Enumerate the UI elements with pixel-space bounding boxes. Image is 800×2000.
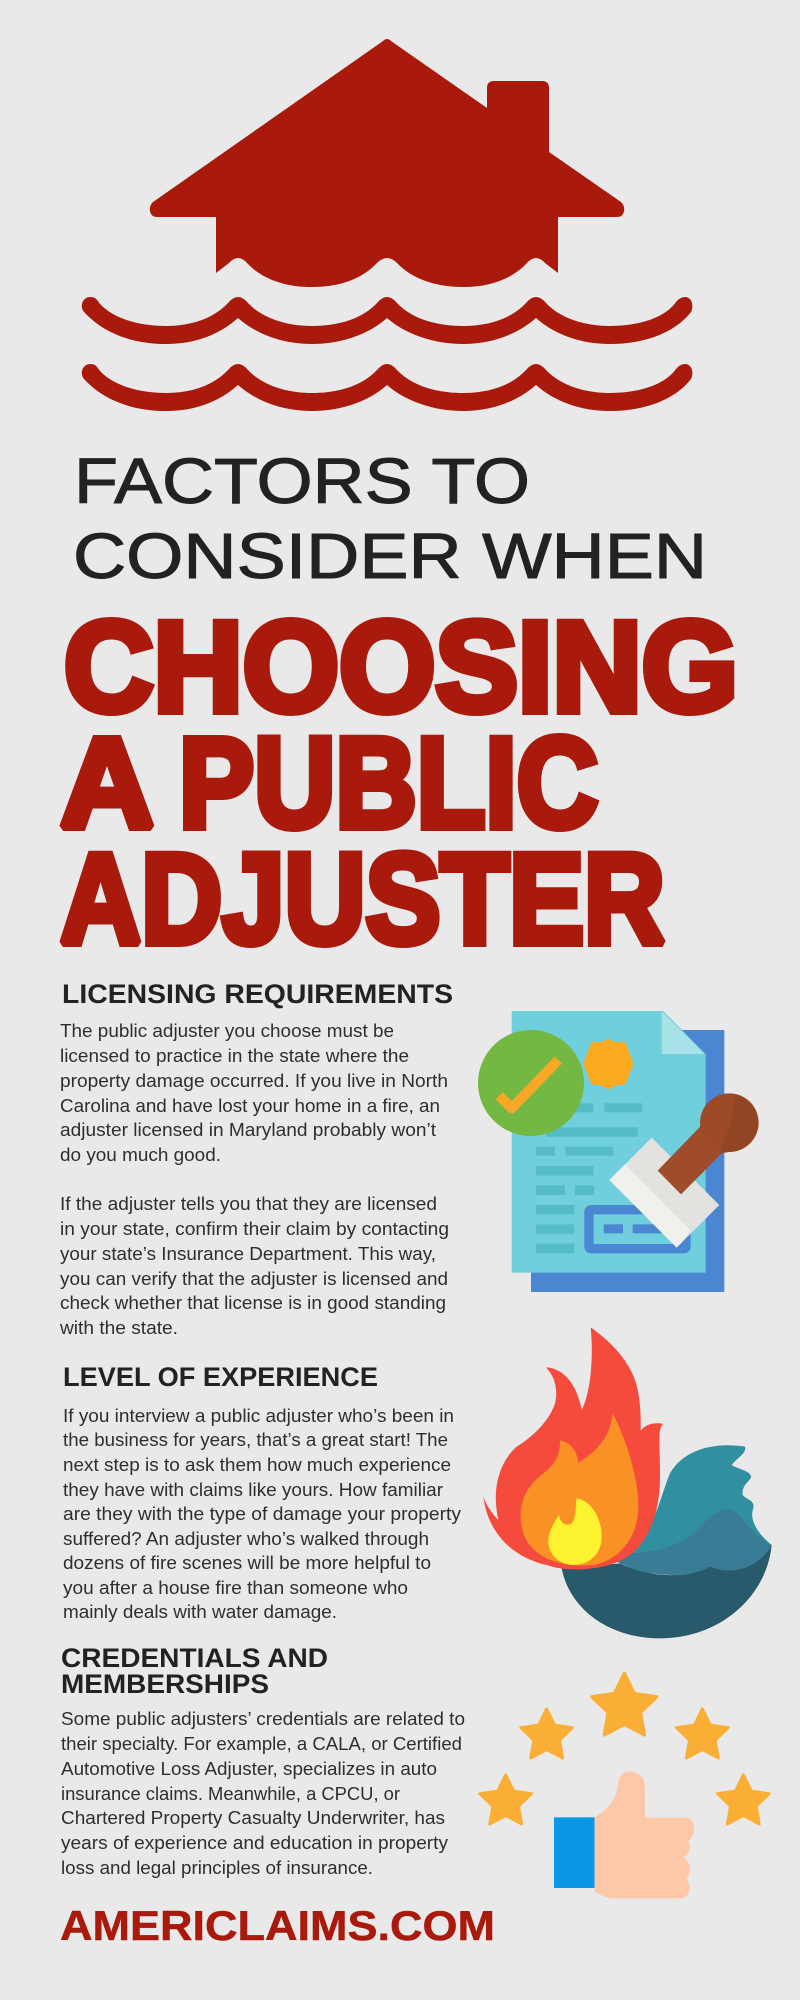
text block: experience paragraph: are they with the type of damage your property [63, 1503, 462, 1524]
title line: adjuster: ADJUSTER [60, 828, 665, 971]
title [60, 445, 738, 971]
flame inner [548, 1498, 602, 1565]
section: level of experience [63, 1362, 462, 1622]
heading: credentials and memberships: MEMBERSHIPS [61, 1669, 269, 1699]
stamp base [609, 1138, 719, 1248]
house silhouette [150, 39, 624, 287]
section: credentials and memberships [61, 1643, 465, 1878]
text block: licensing paragraph one [60, 1020, 448, 1165]
heading: credentials and memberships [61, 1643, 328, 1699]
title line: choosing: CHOOSING [64, 596, 738, 739]
text block: licensing paragraph one: property damage occurred. If you live in North [60, 1070, 448, 1091]
seal badge [584, 1040, 632, 1088]
flame middle [521, 1413, 638, 1566]
text block: credentials paragraph: Automotive Loss Adjuster, specializes in auto [61, 1758, 437, 1779]
heading: credentials and memberships: CREDENTIALS AND [61, 1643, 328, 1673]
text block: licensing paragraph two: you can verify that the adjuster is licensed and [60, 1268, 448, 1289]
front page [512, 1011, 706, 1273]
text block: licensing paragraph two: in your state, confirm their claim by contacting [60, 1218, 449, 1239]
text lines [536, 1103, 642, 1253]
lower wave [82, 364, 692, 411]
wave crest [627, 1445, 772, 1573]
text block: licensing paragraph two: If the adjuster tells you that they are licensed [60, 1193, 437, 1214]
text block: credentials paragraph [61, 1708, 465, 1878]
footer: website: AMERICLAIMS.COM [60, 1902, 495, 1949]
upper wave [82, 297, 692, 344]
check mark [499, 1060, 558, 1108]
text block: credentials paragraph: years of experience and education in property [61, 1832, 449, 1853]
hand [595, 1772, 694, 1898]
text block: credentials paragraph: Chartered Property Casualty Underwriter, has [61, 1807, 445, 1828]
page fold [662, 1011, 704, 1054]
title line: a public: PUBLIC [179, 712, 598, 855]
title line: factors to: FACTORS TO [74, 445, 530, 517]
heading: level of experience: LEVEL OF EXPERIENCE [63, 1362, 378, 1392]
sleeve [554, 1817, 595, 1888]
text block: licensing paragraph one: Carolina and have lost your home in a fire, an [60, 1095, 440, 1116]
icon: fire and water [483, 1327, 772, 1638]
text block: experience paragraph [63, 1405, 462, 1622]
text block: experience paragraph: they have with claims like yours. How familiar [63, 1479, 443, 1500]
heading: licensing requirements: LICENSING REQUIREMENTS [62, 979, 453, 1009]
text block: experience paragraph: suffered? An adjuster who’s walked through [63, 1528, 429, 1549]
text block: licensing paragraph one: licensed to practice in the state where the [60, 1045, 409, 1066]
wave middle [617, 1509, 772, 1575]
text block: experience paragraph: dozens of fire scenes will be more helpful to [63, 1552, 431, 1573]
text block: licensing paragraph one: adjuster licensed in Maryland probably won’t [60, 1119, 437, 1140]
text block: licensing paragraph two [59, 1193, 449, 1338]
back page [531, 1030, 724, 1292]
text block: credentials paragraph: loss and legal principles of insurance. [61, 1857, 373, 1878]
text block: experience paragraph: next step is to ask them how much experience [63, 1454, 451, 1475]
text block: experience paragraph: the business for years, that’s a great start! The [63, 1429, 448, 1450]
text block: experience paragraph: you after a house fire than someone who [63, 1577, 408, 1598]
text block: licensing paragraph one: do you much good. [60, 1144, 221, 1165]
text block: credentials paragraph: Some public adjusters’ credentials are related to [61, 1708, 465, 1729]
five stars [480, 1673, 769, 1824]
text block: experience paragraph: mainly deals with water damage. [63, 1601, 337, 1622]
icon: licence document and stamp [478, 1011, 759, 1292]
green check circle [478, 1030, 584, 1136]
text block: credentials paragraph: insurance claims. Meanwhile, a CPCU, or [61, 1783, 400, 1804]
icon: thumbs up with five stars [480, 1673, 769, 1898]
text block: licensing paragraph one: The public adjuster you choose must be [60, 1020, 394, 1041]
text block: experience paragraph: If you interview a public adjuster who’s been in [63, 1405, 454, 1426]
text block: licensing paragraph two: with the state. [59, 1317, 178, 1338]
title line: a public: A [60, 712, 154, 855]
section: licensing requirements [59, 979, 453, 1338]
title line: consider when: CONSIDER WHEN [73, 520, 707, 592]
wave bowl [562, 1545, 772, 1638]
stamp handle [658, 1093, 759, 1194]
signature box [589, 1210, 686, 1249]
flame outer [483, 1327, 663, 1569]
text block: licensing paragraph two: your state’s Insurance Department. This way, [60, 1243, 436, 1264]
text block: licensing paragraph two: check whether that license is in good standing [60, 1292, 446, 1313]
text block: credentials paragraph: their specialty. For example, a CALA, or Certified [61, 1733, 462, 1754]
icon: flooded house [82, 39, 692, 411]
